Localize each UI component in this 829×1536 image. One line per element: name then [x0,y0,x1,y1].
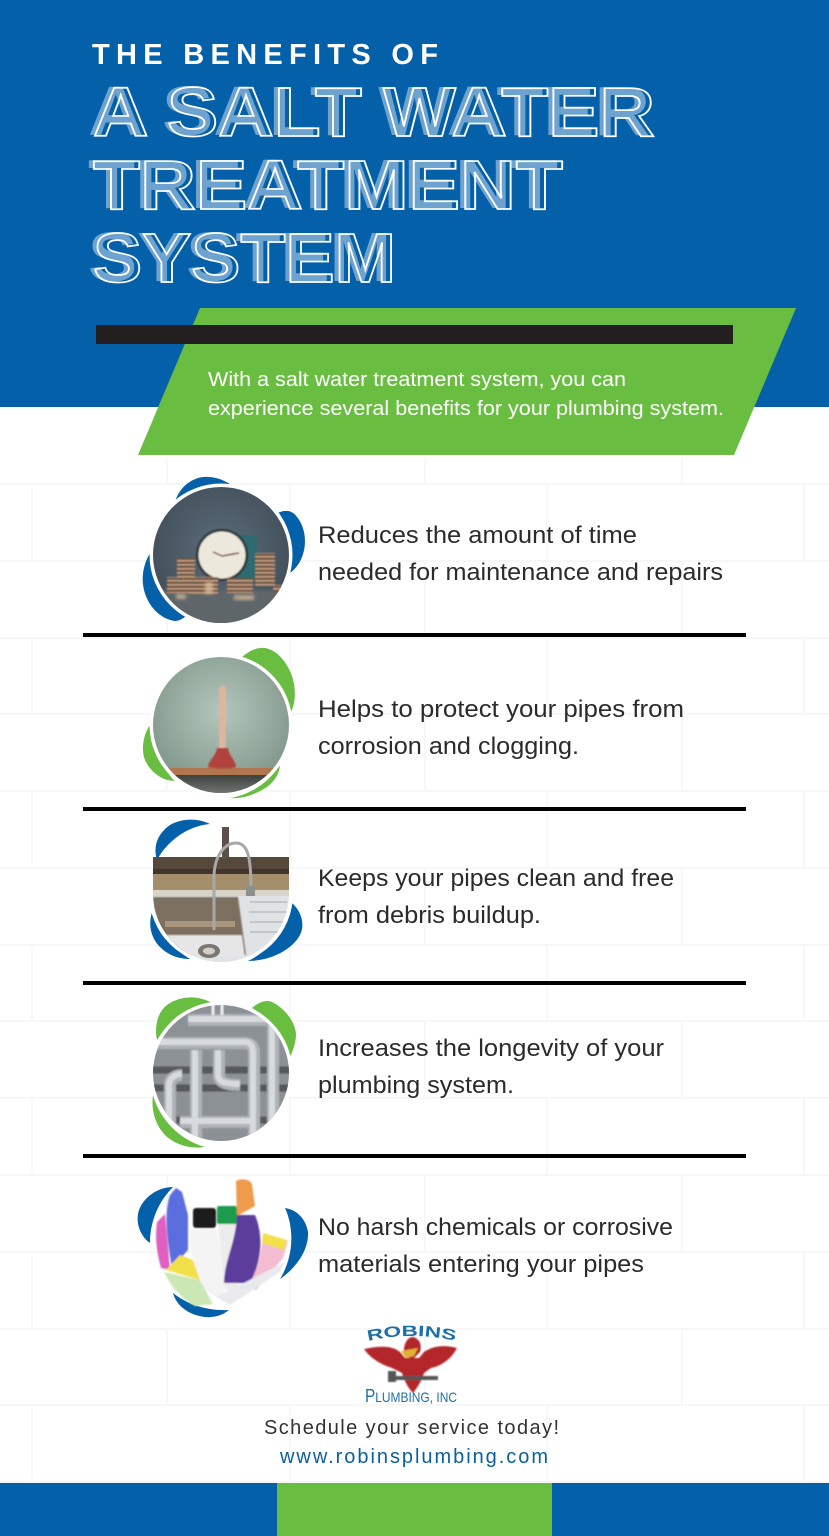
benefit 5 text: No harsh chemicals or corrosive [318,1214,673,1241]
call to action [264,1417,559,1468]
header band [0,0,829,407]
benefit 1 text [318,522,723,586]
icon: plunger [143,648,295,798]
benefit 4 text [318,1035,664,1099]
title main: TREATMENT [88,145,558,223]
divider 1 [83,633,746,637]
benefit 4 [150,997,664,1148]
logo: Robins Plumbing [363,1326,458,1406]
icon: clock and coins [143,477,305,628]
title kicker: THE BENEFITS OF [92,39,438,71]
benefit 1 text: Reduces the amount of time [318,522,637,549]
title main: A SALT WATER [93,73,655,151]
green parallelogram [138,308,796,455]
benefit 2 text: corrosion and clogging. [318,733,579,760]
footer band [0,1483,829,1536]
benefit 2 text [318,696,684,760]
benefit 5 text [318,1214,673,1278]
title main [88,72,655,297]
benefit 1 text: needed for maintenance and repairs [318,559,723,586]
intro text [208,369,724,420]
divider 4 [83,1154,746,1158]
panel: intro banner [96,308,796,455]
call to action: www.robinsplumbing.com [279,1446,548,1468]
intro text: With a salt water treatment system, you can [208,369,626,391]
logo wordmark bottom: PLUMBING, INC [365,1386,457,1406]
benefit 2 [143,648,684,798]
benefit 4 text: plumbing system. [318,1072,514,1099]
title main: SYSTEM [88,218,391,296]
benefit 5 [138,1179,673,1317]
title main: TREATMENT [93,146,563,224]
benefit 3 [149,820,674,966]
benefit 3 text: from debris buildup. [318,902,541,929]
benefit 5 text: materials entering your pipes [318,1251,644,1278]
icon: cleaning bottles [138,1179,308,1317]
benefit 3 text [318,865,674,929]
benefit 4 text: Increases the longevity of your [318,1035,664,1062]
divider 3 [83,981,746,985]
benefit 3 text: Keeps your pipes clean and free [318,865,674,892]
icon: grey pipes [150,997,296,1148]
icon: kitchen sink [149,820,302,966]
call to action: Schedule your service today! [264,1417,559,1439]
title main: SYSTEM [93,219,396,297]
divider 2 [83,807,746,811]
black bar [96,325,733,344]
intro text: experience several benefits for your plumbing system. [208,398,724,420]
benefit 1 [143,477,723,628]
title [88,39,655,297]
benefit 2 text: Helps to protect your pipes from [318,696,684,723]
title main: A SALT WATER [88,72,650,150]
logo bird [364,1337,457,1393]
logo wordmark top: ROBINS [368,1326,456,1341]
